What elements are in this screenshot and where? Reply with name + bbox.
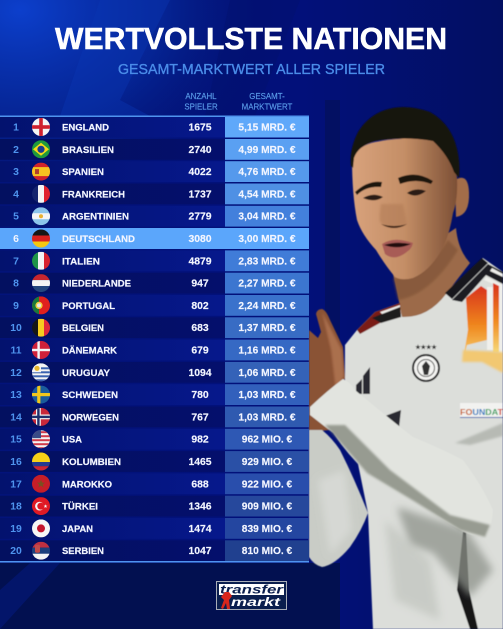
flag: Uruguay: [32, 363, 50, 381]
row 13 Schweden: 13: [10, 390, 22, 401]
row 19 Japan: 19: [10, 524, 22, 535]
row 5 Argentinien: 5: [13, 212, 19, 223]
flag: Frankreich: [32, 185, 50, 203]
row 6 Deutschland highlighted: [0, 228, 309, 249]
face: [352, 138, 457, 279]
flag: Italien: [32, 252, 50, 270]
row 1 England: 1: [13, 122, 19, 134]
logo: transfermarkt: markt: [231, 595, 281, 609]
sponsor patch: FOUNDAT: [460, 407, 503, 417]
row 9 Portugal: [0, 295, 309, 316]
row 1 England: 1675: [188, 122, 212, 134]
row 5 Argentinien: 2779: [188, 212, 212, 223]
row 18 Türkei: 18: [10, 502, 22, 513]
row 2 Brasilien: BRASILIEN: [62, 145, 114, 156]
row 12 Uruguay: URUGUAY: [62, 368, 111, 379]
logo: transfermarkt: transfer: [220, 582, 285, 596]
row 18 Türkei: TÜRKEI: [62, 502, 98, 513]
row 9 Portugal: 9: [13, 301, 19, 312]
sponsor patch: [460, 403, 503, 418]
row 19 Japan: 1474: [188, 524, 212, 535]
flag: Dänemark: [32, 341, 50, 359]
row 8 Niederlande: 8: [13, 279, 19, 290]
row 5 Argentinien: [0, 206, 309, 227]
row 9 Portugal: 802: [191, 301, 209, 312]
row 14 Norwegen: 767: [191, 412, 209, 423]
row 13 Schweden: [0, 384, 309, 405]
neck: [392, 228, 470, 317]
row 15 USA: 982: [191, 435, 209, 446]
row 6 Deutschland highlighted: DEUTSCHLAND: [62, 234, 135, 245]
row 2 Brasilien: 2: [13, 145, 19, 156]
row 6 Deutschland highlighted: 3080: [188, 234, 212, 245]
row 7 Italien: 4879: [188, 256, 212, 267]
column header: Anzahl Spieler: [184, 92, 218, 112]
row 20 Serbien: 20: [10, 546, 22, 557]
ear: [455, 178, 469, 217]
row 16 Kolumbien: [0, 451, 309, 472]
row 12 Uruguay: [0, 362, 309, 383]
ranking table: [0, 116, 309, 562]
row 5 Argentinien: ARGENTINIEN: [62, 212, 129, 223]
left shoulder trim: [357, 303, 401, 334]
flag: Serbien: [32, 542, 50, 560]
row 12 Uruguay: 1094: [188, 368, 212, 379]
row 8 Niederlande: 2,27 MRD. €: [238, 279, 296, 290]
eyes: [363, 189, 426, 200]
sleeve lower arm: [309, 430, 368, 567]
hair: [351, 107, 460, 178]
row 13 Schweden: 780: [191, 390, 209, 401]
row 18 Türkei: 909 MIO. €: [242, 502, 293, 513]
row 2 Brasilien: 4,99 MRD. €: [238, 145, 296, 156]
row 11 Dänemark: [0, 340, 309, 360]
row 14 Norwegen: 1,03 MRD. €: [238, 412, 296, 423]
nose: [380, 204, 407, 228]
row 9 Portugal: PORTUGAL: [62, 301, 115, 312]
torso and jersey: [345, 258, 503, 629]
row 8 Niederlande: 947: [191, 279, 209, 290]
flag: Spanien: [32, 163, 50, 181]
row 7 Italien: 2,83 MRD. €: [238, 256, 296, 267]
flag: Marokko: [32, 475, 50, 493]
table bottom rule: [0, 561, 309, 562]
row 17 Marokko: 922 MIO. €: [242, 479, 293, 490]
eyebrows: [355, 175, 433, 195]
row 10 Belgien: 1,37 MRD. €: [238, 323, 296, 334]
row 15 USA: 15: [10, 435, 22, 446]
row 7 Italien: [0, 250, 309, 271]
crest: [413, 344, 439, 381]
row 6 Deutschland highlighted: 6: [13, 234, 19, 245]
row 19 Japan: [0, 518, 309, 539]
row 17 Marokko: [0, 473, 309, 494]
column header: Anzahl Spieler: SPIELER: [184, 102, 218, 112]
row 13 Schweden: SCHWEDEN: [62, 390, 118, 401]
row 19 Japan: JAPAN: [62, 524, 93, 535]
adidas stripes: [356, 367, 370, 394]
crest: ★★★★: [415, 344, 437, 351]
row 10 Belgien: 10: [10, 323, 22, 334]
flag: Japan: [32, 519, 50, 537]
row 3 Spanien: 3: [13, 167, 19, 178]
row 14 Norwegen: 14: [10, 412, 22, 423]
row 18 Türkei: [0, 496, 309, 516]
right sleeve seam: [455, 423, 503, 445]
row 8 Niederlande: NIEDERLANDE: [62, 279, 132, 290]
flag: USA: [32, 430, 50, 449]
row 4 Frankreich: 4: [13, 189, 19, 200]
row 17 Marokko: 688: [191, 479, 209, 490]
row 3 Spanien: [0, 161, 309, 182]
logo: transfermarkt: [216, 582, 286, 610]
column header: Gesamt-Marktwert: GESAMT-: [249, 92, 285, 101]
row 4 Frankreich: [0, 184, 309, 204]
row 4 Frankreich: FRANKREICH: [62, 189, 125, 200]
row 13 Schweden: 1,03 MRD. €: [238, 390, 296, 401]
row 4 Frankreich: 1737: [188, 189, 212, 200]
column header: Gesamt-Marktwert: [242, 92, 293, 112]
row 20 Serbien: 810 MIO. €: [242, 546, 293, 557]
row 15 USA: 962 MIO. €: [242, 435, 293, 446]
icon: red player figure: [221, 592, 232, 609]
row 20 Serbien: 1047: [188, 546, 212, 557]
row 9 Portugal: 2,24 MRD. €: [238, 301, 296, 312]
mouth: [382, 240, 413, 257]
row 12 Uruguay: 12: [10, 368, 22, 379]
flag: Brasilien: [32, 140, 50, 158]
player photo: [309, 107, 503, 629]
row 5 Argentinien: 3,04 MRD. €: [238, 212, 296, 223]
row 18 Türkei: 1346: [188, 502, 212, 513]
sleeve forearm: [310, 379, 493, 537]
row 1 England: [0, 117, 309, 138]
row 20 Serbien: SERBIEN: [62, 546, 104, 557]
row 17 Marokko: 17: [10, 479, 22, 490]
row 15 USA: USA: [62, 435, 82, 446]
flag: Argentinien: [32, 207, 50, 225]
row 1 England: ENGLAND: [62, 122, 109, 134]
flag: Deutschland: [32, 230, 50, 248]
flag: England: [32, 118, 50, 136]
row 14 Norwegen: [0, 406, 309, 427]
row 12 Uruguay: 1,06 MRD. €: [238, 368, 296, 379]
row 16 Kolumbien: 16: [10, 457, 22, 468]
flag: Belgien: [32, 319, 50, 337]
row 3 Spanien: 4,76 MRD. €: [238, 167, 296, 178]
flag: Norwegen: [32, 408, 50, 426]
row 3 Spanien: 4022: [188, 167, 212, 178]
flag: Portugal: [32, 296, 50, 314]
jersey chest mark: [385, 410, 401, 428]
flag: Schweden: [32, 386, 50, 404]
flag: Kolumbien: [32, 452, 50, 470]
flag: Türkei: [32, 497, 50, 515]
row 8 Niederlande: [0, 273, 309, 294]
sleeve stripes: [463, 286, 487, 360]
row 16 Kolumbien: KOLUMBIEN: [62, 457, 121, 468]
row 3 Spanien: SPANIEN: [62, 167, 104, 178]
column header: Anzahl Spieler: ANZAHL: [185, 92, 217, 101]
row 6 Deutschland highlighted: 3,00 MRD. €: [238, 234, 296, 245]
row 10 Belgien: BELGIEN: [62, 323, 104, 334]
row 14 Norwegen: NORWEGEN: [62, 412, 119, 423]
row 10 Belgien: [0, 317, 309, 338]
row 11 Dänemark: 679: [191, 346, 209, 356]
row 11 Dänemark: DÄNEMARK: [62, 346, 117, 356]
row 2 Brasilien: [0, 139, 309, 160]
hand: [309, 309, 345, 432]
table top rule: [0, 116, 309, 117]
row 11 Dänemark: 1,16 MRD. €: [238, 346, 296, 356]
row 11 Dänemark: 11: [11, 346, 22, 356]
row 19 Japan: 839 MIO. €: [242, 524, 293, 535]
row 20 Serbien: [0, 540, 309, 561]
flag: Niederlande: [32, 274, 50, 292]
title: WERTVOLLSTE NATIONEN: [55, 22, 447, 56]
collar: [445, 258, 488, 299]
row 15 USA: [0, 429, 309, 450]
black side stripe: [457, 532, 478, 629]
jersey shadows: [397, 507, 493, 597]
column header: Gesamt-Marktwert: MARKTWERT: [242, 102, 293, 112]
row 7 Italien: 7: [13, 256, 19, 267]
row 16 Kolumbien: 1465: [188, 457, 212, 468]
row 17 Marokko: MAROKKO: [62, 479, 113, 490]
row 16 Kolumbien: 929 MIO. €: [242, 457, 293, 468]
row 7 Italien: ITALIEN: [62, 256, 100, 267]
subtitle: GESAMT-MARKTWERT ALLER SPIELER: [118, 62, 385, 78]
row 4 Frankreich: 4,54 MRD. €: [238, 189, 296, 200]
row 10 Belgien: 683: [191, 323, 209, 334]
row 1 England: 5,15 MRD. €: [238, 122, 296, 134]
row 2 Brasilien: 2740: [188, 145, 212, 156]
